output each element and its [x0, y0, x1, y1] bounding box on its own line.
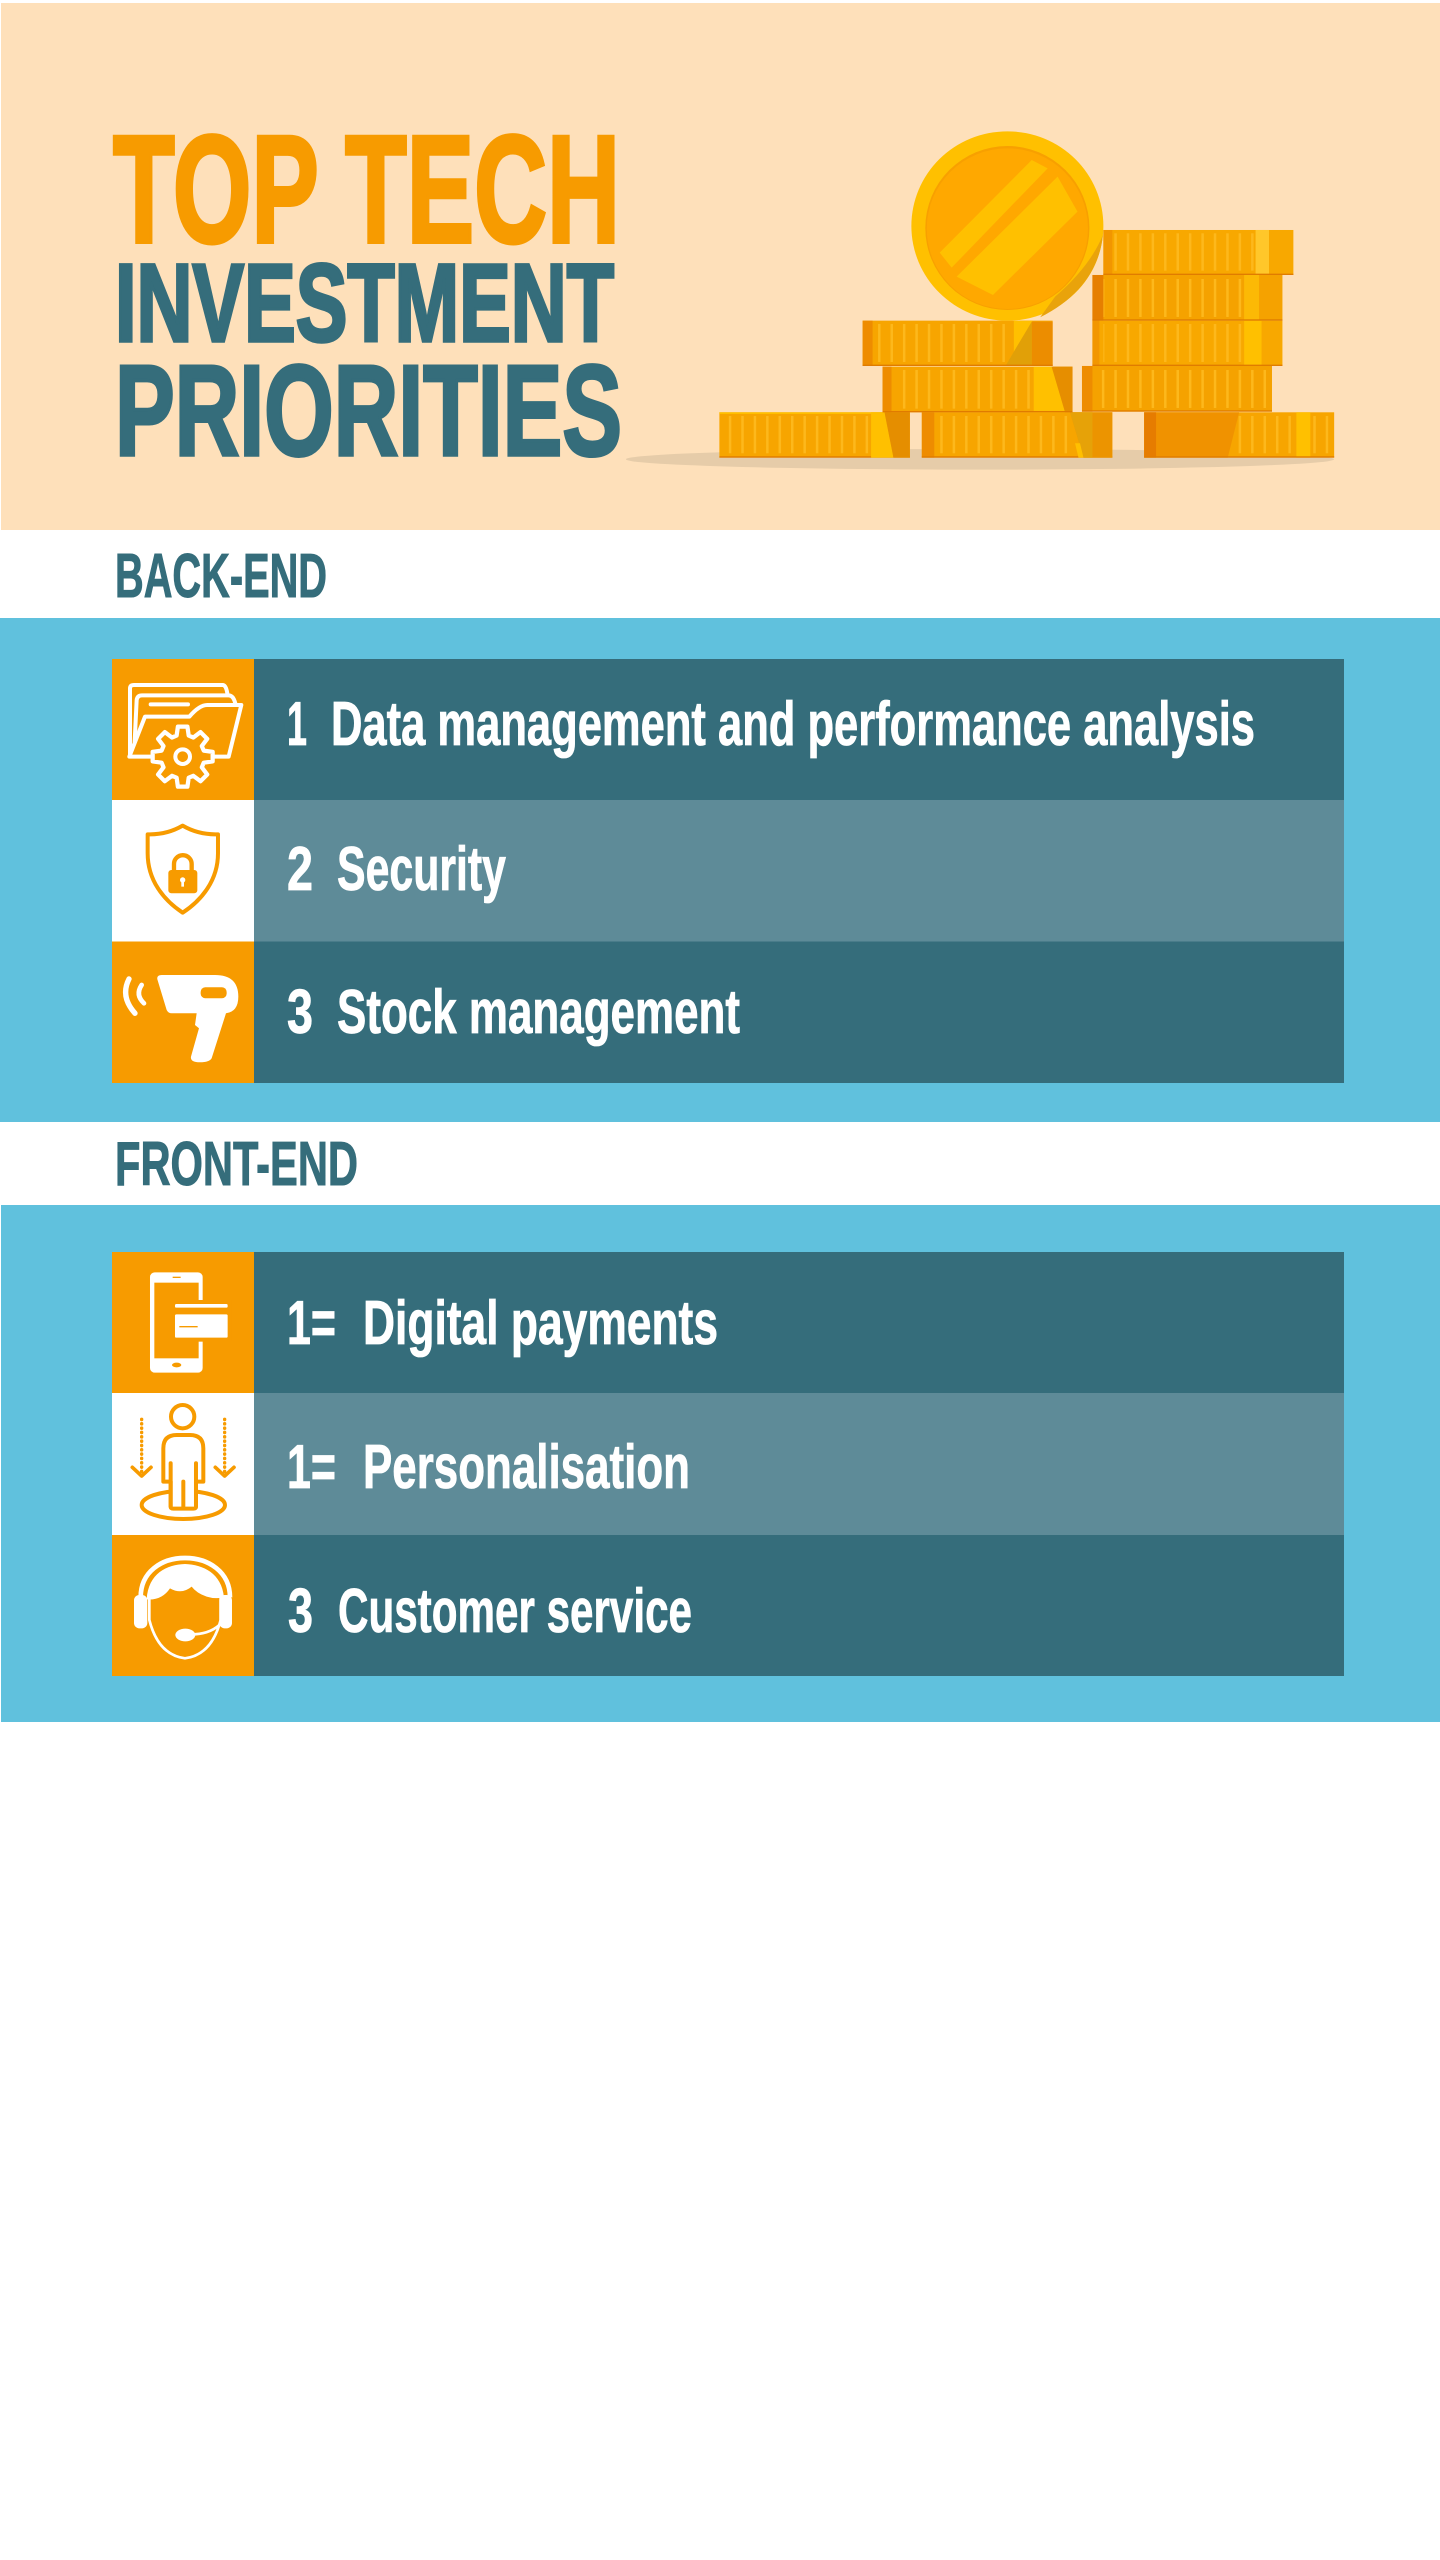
title: TOP TECH [113, 104, 620, 275]
heading: front-end: FRONT-END [115, 1130, 358, 1199]
label: rank 2 security: Security [337, 835, 506, 904]
panel: hero header [1, 3, 1440, 530]
label: rank 1= digital payments: Digital payments [363, 1289, 718, 1358]
row: digital payments [112, 1252, 1344, 1393]
icon: barcode scanner [126, 975, 238, 1062]
row: security [112, 800, 1344, 942]
label: rank 3 stock management: 3 [287, 978, 313, 1047]
label: rank 1= digital payments: 1= [287, 1289, 336, 1358]
label: rank 3 customer service [288, 1577, 692, 1646]
icon: headset agent [134, 1558, 232, 1658]
label: rank 1= personalisation: Personalisation [363, 1433, 690, 1502]
label: rank 1= personalisation: 1= [287, 1433, 336, 1502]
panel: back-end [0, 618, 1440, 1122]
panel: front-end [1, 1205, 1440, 1722]
row: customer service [112, 1535, 1344, 1676]
label: rank 3 stock management [287, 978, 740, 1047]
label: rank 1= personalisation [287, 1433, 690, 1502]
label: rank 1= digital payments [287, 1289, 718, 1358]
label: rank 2 security [287, 835, 506, 904]
label: rank 3 stock management: Stock management [337, 978, 740, 1047]
icon: person on target [132, 1405, 234, 1519]
icon: shield with lock [148, 826, 218, 913]
icon: phone and card [150, 1272, 231, 1373]
row: personalisation [112, 1393, 1344, 1535]
label: rank 3 customer service: Customer service [338, 1577, 692, 1646]
illustration: gold coins [626, 131, 1334, 470]
row: stock management [112, 942, 1344, 1083]
title [113, 104, 622, 483]
heading: back-end: BACK-END [115, 542, 327, 611]
label: rank 3 customer service: 3 [288, 1577, 313, 1646]
icon: folders with gear [129, 685, 241, 787]
title: PRIORITIES [115, 339, 622, 483]
title: INVESTMENT [115, 242, 614, 365]
label: rank 2 security: 2 [287, 835, 313, 904]
label: rank 1 data management: 1 [287, 690, 307, 759]
row: data management [112, 659, 1344, 800]
